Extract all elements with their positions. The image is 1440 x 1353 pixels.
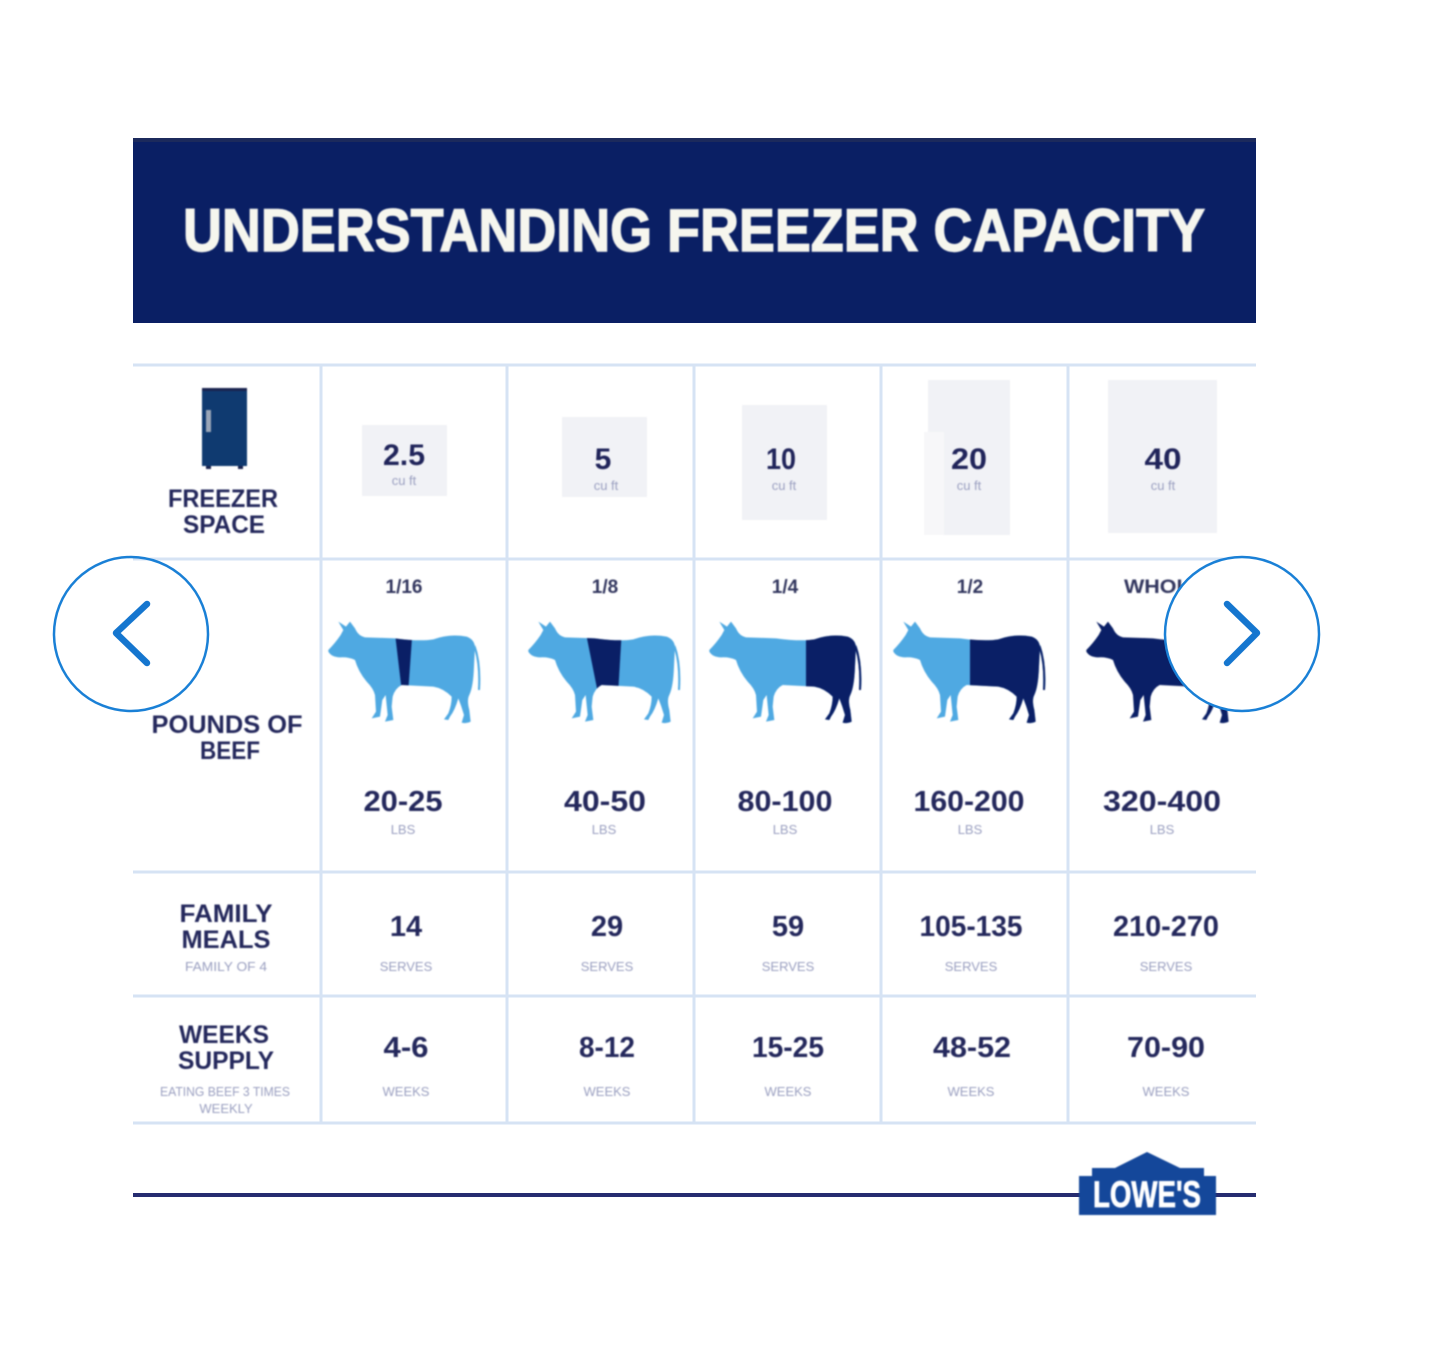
weeks values: 70-90 [1127, 1032, 1205, 1064]
freezer size: 2.5 cu ft: cu ft [392, 473, 417, 488]
fraction labels: 1/8 [592, 577, 618, 598]
fraction labels: 1/16 [386, 577, 422, 598]
button: previous [54, 557, 208, 711]
icon: cow 1/16 [328, 622, 480, 723]
label: pounds of beef: BEEF [200, 737, 260, 765]
logo: Lowe's: LOWE'S [1093, 1174, 1201, 1215]
label: freezer space: FREEZER [168, 485, 278, 513]
icon: whole cow [1086, 622, 1238, 723]
meals values: 105-135 [920, 911, 1022, 943]
label: freezer space: SPACE [183, 511, 265, 539]
pounds units: LBS [391, 822, 416, 837]
table grid [133, 365, 1256, 1123]
label: family meals: FAMILY [180, 900, 273, 928]
freezer size: 10 cu ft [742, 405, 827, 520]
meals values: 29 [591, 911, 623, 943]
freezer size: 40 cu ft: cu ft [1151, 478, 1176, 493]
pounds values [364, 786, 1221, 818]
weeks units: WEEKS [948, 1084, 995, 1099]
title: UNDERSTANDING FREEZER CAPACITY [183, 197, 1205, 264]
icon: cow 1/2 [893, 622, 1045, 723]
meals units: SERVES [945, 959, 998, 974]
pounds units: LBS [958, 822, 983, 837]
weeks units: WEEKS [765, 1084, 812, 1099]
freezer size: 2.5 cu ft: 2.5 [383, 439, 425, 472]
weeks values [384, 1032, 1205, 1064]
fraction labels [386, 577, 1204, 598]
pounds values: 20-25 [364, 786, 442, 818]
weeks values: 48-52 [933, 1032, 1011, 1064]
freezer size: 10 cu ft: cu ft [772, 478, 797, 493]
icon: freezer [202, 388, 247, 469]
freezer size: 5 cu ft: cu ft [594, 478, 619, 493]
pounds units: LBS [773, 822, 798, 837]
row: pounds of beef [152, 577, 1238, 837]
freezer size: 40 cu ft: 40 [1144, 443, 1182, 476]
sublabel: family of 4: FAMILY OF 4 [185, 959, 267, 974]
icon: right chevron [1227, 604, 1257, 663]
row: freezer space [168, 380, 1217, 539]
freezer size: 40 cu ft [1108, 380, 1217, 533]
freezer size: 20 cu ft: 20 [951, 443, 987, 476]
weeks units [383, 1084, 1190, 1099]
weeks values: 8-12 [579, 1032, 635, 1064]
pounds values: 320-400 [1103, 786, 1221, 818]
row: weeks supply [160, 1021, 1205, 1116]
meals values: 14 [390, 911, 422, 943]
fraction labels: WHOLE [1124, 577, 1204, 598]
pounds units: LBS [592, 822, 617, 837]
sublabel: eating beef 3 times weekly: EATING BEEF 3 TIMES [160, 1084, 290, 1099]
meals units [380, 959, 1193, 974]
label: pounds of beef: POUNDS OF [152, 711, 302, 739]
row: family meals [180, 900, 1219, 974]
pounds values: 160-200 [914, 786, 1024, 818]
meals units: SERVES [1140, 959, 1193, 974]
label: family meals: MEALS [182, 926, 270, 954]
freezer size: 5 cu ft: 5 [595, 443, 611, 476]
meals values: 210-270 [1113, 911, 1219, 943]
meals units: SERVES [380, 959, 433, 974]
fraction labels: 1/2 [957, 577, 983, 598]
meals units: SERVES [762, 959, 815, 974]
pounds units: LBS [1150, 822, 1175, 837]
label: weeks supply: WEEKS [179, 1021, 269, 1049]
weeks values: 15-25 [752, 1032, 824, 1064]
freezer size: 10 cu ft: 10 [766, 443, 796, 476]
icon: cow 1/4 [709, 622, 861, 723]
fraction labels: 1/4 [772, 577, 799, 598]
weeks units: WEEKS [584, 1084, 631, 1099]
freezer size: 20 cu ft [924, 380, 1010, 535]
freezer size: 5 cu ft [562, 417, 647, 497]
freezer size: 2.5 cu ft [362, 425, 447, 496]
header banner [133, 138, 1256, 323]
sublabel: eating beef 3 times weekly: WEEKLY [199, 1101, 253, 1116]
meals values: 59 [772, 911, 804, 943]
icon: left chevron [116, 604, 147, 663]
label: weeks supply: SUPPLY [178, 1047, 274, 1075]
icon: cow 1/8 [528, 622, 680, 723]
freezer size: 20 cu ft: cu ft [957, 478, 982, 493]
pounds values: 80-100 [738, 786, 832, 818]
pounds units [391, 822, 1175, 837]
pounds values: 40-50 [564, 786, 646, 818]
meals values [390, 911, 1219, 943]
footer rule [133, 1193, 1256, 1197]
button: next [1165, 557, 1319, 711]
weeks units: WEEKS [1143, 1084, 1190, 1099]
weeks values: 4-6 [384, 1032, 428, 1064]
meals units: SERVES [581, 959, 634, 974]
weeks units: WEEKS [383, 1084, 430, 1099]
logo: Lowe's [1079, 1152, 1216, 1215]
